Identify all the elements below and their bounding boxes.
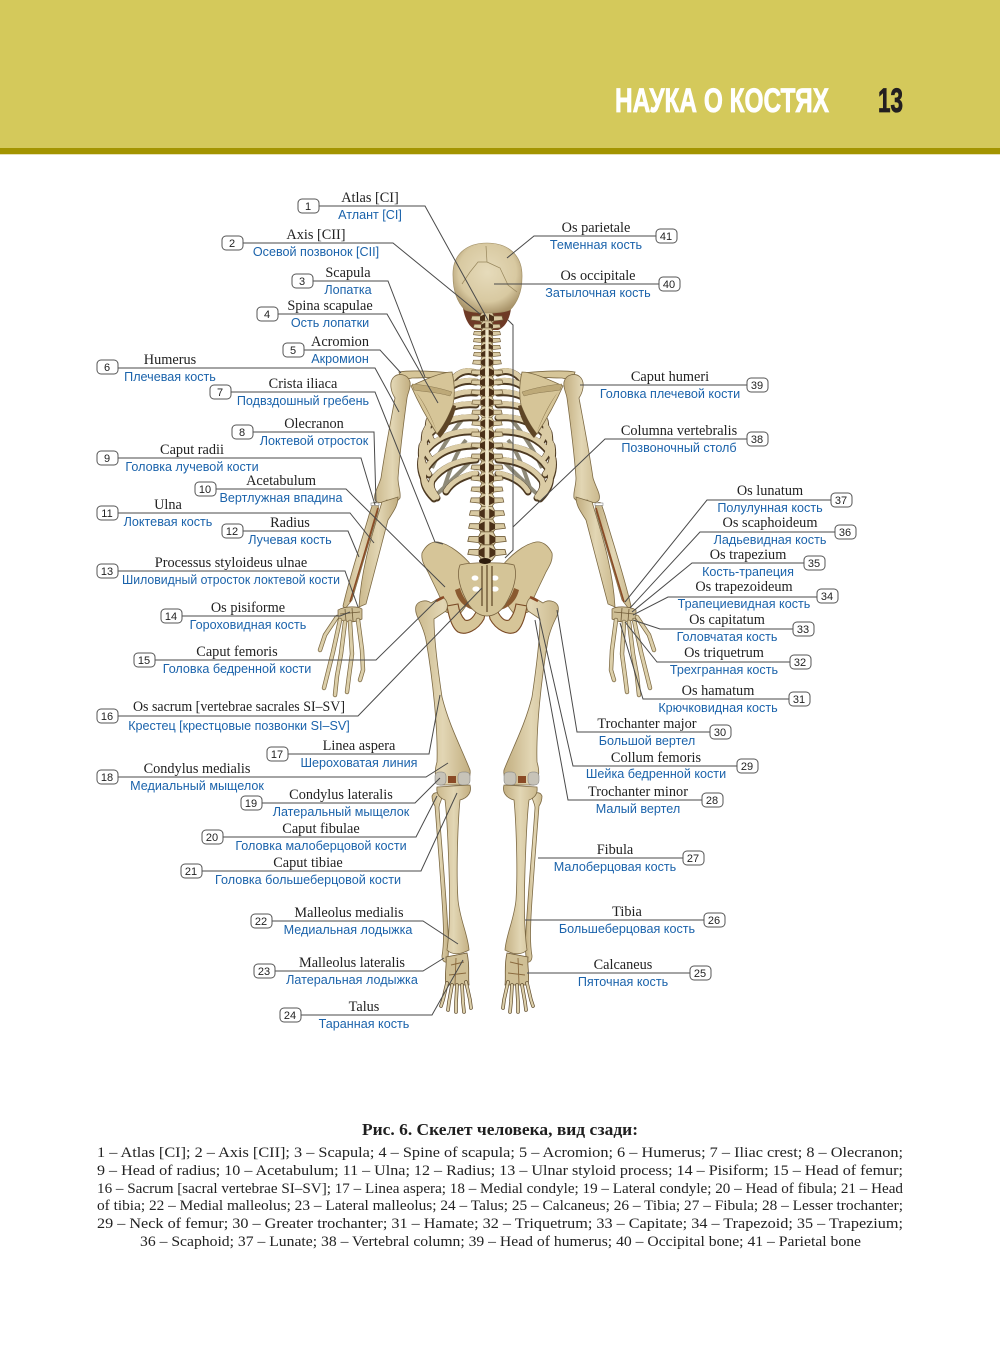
header band	[0, 0, 1000, 155]
sacrum	[458, 558, 516, 616]
callout 13: Processus styloideus ulnae: 13	[101, 566, 113, 578]
callout 19: Condylus lateralis: 19	[245, 798, 257, 810]
callout 2: Axis: Осевой позвонок [CII]	[253, 245, 379, 259]
callout 29: Collum femoris	[537, 608, 758, 781]
callout 34: Os trapezoideum: Трапециевидная кость	[678, 597, 811, 611]
callout 27: Fibula: Малоберцовая кость	[554, 860, 677, 874]
callout 24: Talus: Talus	[349, 999, 380, 1015]
callout 18: Condylus medialis: 18	[101, 772, 113, 784]
callout 20: Caput fibulae: Головка малоберцовой кости	[235, 839, 407, 853]
callout 30: Trochanter major: Trochanter major	[597, 716, 697, 732]
callout 7: Crista iliaca: 7	[217, 387, 223, 399]
callout 11: Ulna: Ulna	[154, 497, 183, 513]
callout 37: Os lunatum: 37	[835, 495, 847, 507]
callout 15: Caput femoris: Головка бедренной кости	[163, 662, 311, 676]
callout 13: Processus styloideus ulnae	[97, 555, 358, 607]
callout 7: Crista iliaca: Crista iliaca	[269, 376, 338, 392]
callout 38: Columna vertebralis: 38	[751, 434, 763, 446]
callout 6: Humerus: Humerus	[144, 352, 197, 368]
callout 3: Scapula: 3	[299, 276, 305, 288]
caption heading: Рис. 6. Скелет человека, вид сзади:	[362, 1120, 638, 1139]
callout 33: Os capitatum: Os capitatum	[689, 612, 765, 628]
callout 22: Malleolus medialis: 22	[255, 916, 267, 928]
callout 9: Caput radii: Caput radii	[160, 442, 224, 458]
callout 22: Malleolus medialis: Медиальная лодыжка	[284, 923, 412, 937]
callout 16: Os sacrum: Os sacrum [vertebrae sacrales SI–SV]	[133, 699, 345, 715]
callout 17: Linea aspera: Шероховатая линия	[300, 756, 418, 770]
callout 5: Acromion	[283, 334, 401, 373]
callout 41: Os parietale: Теменная кость	[550, 238, 643, 252]
callout 14: Os pisiforme: Гороховидная кость	[190, 618, 307, 632]
callout 5: Acromion: Acromion	[311, 334, 369, 350]
callout 14: Os pisiforme: 14	[165, 611, 177, 623]
callout 27: Fibula: 27	[687, 853, 699, 865]
callout 13: Processus styloideus ulnae: Шиловидный отросток локтевой кости	[122, 573, 340, 587]
callout 21: Caput tibiae: 21	[185, 866, 197, 878]
callout 16: Os sacrum	[97, 588, 482, 733]
callout 18: Condylus medialis: Condylus medialis	[144, 761, 251, 777]
callout 4: Spina scapulae: Spina scapulae	[287, 298, 373, 314]
caption body: 29 – Neck of femur; 30 – Greater trochanter; 31 – Hamate; 32 – Triquetrum; 33 – Capitate; 34 – Trapezoid; 35 – Trapezium;	[97, 1216, 903, 1232]
callout 15: Caput femoris	[134, 600, 437, 676]
callout 26: Tibia	[525, 904, 725, 936]
callout 14: Os pisiforme	[161, 600, 350, 632]
callout 6: Humerus	[97, 352, 399, 412]
callout 26: Tibia: Большеберцовая кость	[559, 922, 696, 936]
callout 24: Talus	[280, 960, 463, 1031]
callout 40: Os occipitale: Затылочная кость	[545, 286, 651, 300]
callout 31: Os hamatum: Os hamatum	[682, 683, 754, 699]
callout 17: Linea aspera: Linea aspera	[323, 738, 396, 754]
callout 39: Caput humeri: 39	[751, 380, 763, 392]
callout 35: Os trapezium: 35	[808, 558, 820, 570]
callout 30: Trochanter major: 30	[714, 727, 726, 739]
callout 15: Caput femoris: 15	[138, 655, 150, 667]
caption body: 9 – Head of radius; 10 – Acetabulum; 11 – Ulna; 12 – Radius; 13 – Ulnar styloid process; 14 – Pisiform; 15 – Head of femur;	[97, 1163, 903, 1179]
callout 20: Caput fibulae	[202, 796, 437, 853]
caption body: of tibia; 22 – Medial malleolus; 23 – Lateral malleolus; 24 – Talus; 25 – Calcaneus; 26 – Tibia; 27 – Fibula; 28 – Lesser trochanter;	[97, 1198, 903, 1214]
callout 13: Processus styloideus ulnae: Processus styloideus ulnae	[155, 555, 307, 571]
callout 39: Caput humeri	[580, 369, 768, 401]
callout 28: Trochanter minor	[535, 620, 723, 816]
caption body	[97, 1145, 904, 1250]
callout 33: Os capitatum: 33	[797, 624, 809, 636]
callout 33: Os capitatum: Головчатая кость	[677, 630, 778, 644]
skull	[453, 243, 522, 313]
callout 19: Condylus lateralis: Condylus lateralis	[289, 787, 393, 803]
caption body: 36 – Scaphoid; 37 – Lunate; 38 – Vertebral column; 39 – Head of humerus; 40 – Occipital bone; 41 – Parietal bone	[140, 1234, 861, 1250]
callout 19: Condylus lateralis: Латеральный мыщелок	[273, 805, 410, 819]
callout 36: Os scaphoideum: Ладьевидная кость	[714, 533, 827, 547]
callout 3: Scapula: Scapula	[325, 265, 371, 281]
callout 26: Tibia: Tibia	[612, 904, 642, 920]
callout 2: Axis: Axis [CII]	[286, 227, 346, 243]
callout 18: Condylus medialis	[97, 761, 448, 793]
chapter title: НАУКА О КОСТЯХ	[615, 82, 829, 120]
callout 36: Os scaphoideum: 36	[839, 527, 851, 539]
callout 14: Os pisiforme: Os pisiforme	[211, 600, 285, 616]
callout 12: Radius: 12	[226, 526, 238, 538]
callout 36: Os scaphoideum: Os scaphoideum	[723, 515, 817, 531]
callout 38: Columna vertebralis: Columna vertebralis	[621, 423, 738, 439]
callout 11: Ulna: 11	[101, 508, 113, 520]
callout 11: Ulna	[97, 497, 374, 543]
callout 37: Os lunatum: Os lunatum	[737, 483, 803, 499]
callout 34: Os trapezoideum: Os trapezoideum	[695, 579, 793, 595]
callout 29: Collum femoris: Шейка бедренной кости	[586, 767, 726, 781]
callout 10: Acetabulum: 10	[199, 484, 211, 496]
callout 20: Caput fibulae: 20	[206, 832, 218, 844]
callout 4: Spina scapulae	[257, 298, 438, 403]
callout 5: Acromion: 5	[290, 345, 296, 357]
callout 40: Os occipitale: Os occipitale	[560, 268, 636, 284]
callout 38: Columna vertebralis: Позвоночный столб	[621, 441, 737, 455]
callout 27: Fibula: Fibula	[597, 842, 634, 858]
callout 26: Tibia: 26	[708, 915, 720, 927]
callout 32: Os triquetrum: Трехгранная кость	[670, 663, 778, 677]
callout 21: Caput tibiae	[181, 793, 457, 887]
callout 23: Malleolus lateralis: 23	[258, 966, 270, 978]
callout 41: Os parietale: Os parietale	[562, 220, 630, 236]
callout 4: Spina scapulae: Ость лопатки	[291, 316, 369, 330]
callout 16: Os sacrum: Крестец [крестцовые позвонки SI–SV]	[128, 719, 350, 733]
callout 12: Radius: Лучевая кость	[248, 533, 332, 547]
callout 35: Os trapezium	[632, 547, 825, 612]
figure caption	[97, 1120, 904, 1250]
callout 11: Ulna: Локтевая кость	[124, 515, 213, 529]
callout 9: Caput radii	[97, 442, 375, 505]
callout 30: Trochanter major: Большой вертел	[599, 734, 695, 748]
callout 31: Os hamatum: 31	[793, 694, 805, 706]
callout 2: Axis	[222, 227, 480, 314]
skeleton illustration	[320, 243, 654, 1012]
callout 28: Trochanter minor: Trochanter minor	[588, 784, 688, 800]
left half of skeleton	[320, 370, 486, 1012]
callout 23: Malleolus lateralis: Malleolus lateralis	[299, 955, 405, 971]
callout 33: Os capitatum	[633, 612, 814, 644]
spine	[468, 312, 506, 560]
callout 41: Os parietale	[507, 220, 677, 258]
callout 32: Os triquetrum	[625, 622, 811, 677]
callout 25: Calcaneus: Пяточная кость	[578, 975, 669, 989]
callout 23: Malleolus lateralis: Латеральная лодыжка	[286, 973, 418, 987]
callout 12: Radius	[222, 515, 359, 557]
callout 37: Os lunatum: Полулунная кость	[717, 501, 823, 515]
callout 30: Trochanter major	[557, 610, 731, 748]
callout 15: Caput femoris: Caput femoris	[196, 644, 278, 660]
callout 29: Collum femoris: 29	[741, 761, 753, 773]
caption body: 16 – Sacrum [sacral vertebrae SI–SV]; 17 – Linea aspera; 18 – Medial condyle; 19 – Lateral condyle; 20 – Head of fibula; 21 – Head	[97, 1181, 904, 1197]
callout 24: Talus: Таранная кость	[319, 1017, 410, 1031]
callout 39: Caput humeri: Головка плечевой кости	[600, 387, 740, 401]
callout 38: Columna vertebralis	[513, 423, 768, 527]
callout 36: Os scaphoideum	[630, 515, 856, 608]
page number: 13	[878, 82, 903, 120]
callout 27: Fibula	[538, 842, 704, 874]
callout 35: Os trapezium: Os trapezium	[710, 547, 786, 563]
caption body: 1 – Atlas [CI]; 2 – Axis [CII]; 3 – Scapula; 4 – Spine of scapula; 5 – Acromion; 6 – Humerus; 7 – Iliac crest; 8 – Olecranon;	[97, 1145, 903, 1161]
jaw	[463, 308, 511, 330]
callout 1: Atlas: Atlas [CI]	[341, 190, 399, 206]
callout 10: Acetabulum: Вертлужная впадина	[220, 491, 342, 505]
callout 25: Calcaneus	[527, 957, 711, 989]
callout 9: Caput radii: 9	[104, 453, 110, 465]
callout 28: Trochanter minor: Малый вертел	[596, 802, 680, 816]
callout 21: Caput tibiae: Caput tibiae	[273, 855, 343, 871]
callout 32: Os triquetrum: 32	[794, 657, 806, 669]
callout 17: Linea aspera	[267, 695, 440, 770]
callout 41: Os parietale: 41	[660, 231, 672, 243]
callout 8: Olecranon	[232, 416, 376, 503]
callout 31: Os hamatum	[620, 623, 810, 715]
callout 8: Olecranon: 8	[239, 427, 245, 439]
callout 32: Os triquetrum: Os triquetrum	[684, 645, 764, 661]
callout 34: Os trapezoideum: 34	[821, 591, 833, 603]
callout 23: Malleolus lateralis	[254, 955, 444, 987]
callout 10: Acetabulum: Acetabulum	[246, 473, 316, 489]
callout 24: Talus: 24	[284, 1010, 296, 1022]
callout 6: Humerus: Плечевая кость	[124, 370, 216, 384]
callout 17: Linea aspera: 17	[271, 749, 283, 761]
callout 7: Crista iliaca	[210, 376, 443, 544]
callout 8: Olecranon: Локтевой отросток	[260, 434, 369, 448]
callout 19: Condylus lateralis	[241, 778, 440, 819]
leader line along spine	[505, 320, 513, 558]
callout 4: Spina scapulae: 4	[264, 309, 270, 321]
callout 10: Acetabulum	[195, 473, 445, 587]
callout 7: Crista iliaca: Подвздошный гребень	[237, 394, 370, 408]
callout 16: Os sacrum: 16	[101, 711, 113, 723]
callout 1: Atlas	[298, 190, 488, 320]
callout 1: Atlas: 1	[305, 201, 311, 213]
callout 9: Caput radii: Головка лучевой кости	[125, 460, 259, 474]
callout 22: Malleolus medialis: Malleolus medialis	[294, 905, 404, 921]
callout 3: Scapula	[292, 265, 425, 377]
callout 40: Os occipitale: 40	[663, 279, 675, 291]
right half of skeleton	[488, 370, 654, 1012]
callout 39: Caput humeri: Caput humeri	[631, 369, 709, 385]
callout 25: Calcaneus: Calcaneus	[594, 957, 653, 973]
callout 35: Os trapezium: Кость-трапеция	[702, 565, 794, 579]
callout 6: Humerus: 6	[104, 362, 110, 374]
callout 5: Acromion: Акромион	[311, 352, 369, 366]
callout 34: Os trapezoideum	[633, 579, 838, 615]
callout 20: Caput fibulae: Caput fibulae	[282, 821, 360, 837]
callout 37: Os lunatum	[625, 483, 852, 602]
callout 25: Calcaneus: 25	[694, 968, 706, 980]
callout 21: Caput tibiae: Головка большеберцовой кости	[215, 873, 401, 887]
callout 18: Condylus medialis: Медиальный мыщелок	[130, 779, 264, 793]
callout 12: Radius: Radius	[270, 515, 310, 531]
callout 1: Atlas: Атлант [CI]	[338, 208, 402, 222]
callout 29: Collum femoris: Collum femoris	[611, 750, 702, 766]
callout 40: Os occipitale	[494, 268, 680, 300]
callout 28: Trochanter minor: 28	[706, 795, 718, 807]
callout 22: Malleolus medialis	[251, 905, 458, 944]
callout 31: Os hamatum: Крючковидная кость	[658, 701, 778, 715]
callout 3: Scapula: Лопатка	[324, 283, 372, 297]
callout 8: Olecranon: Olecranon	[284, 416, 344, 432]
callout 2: Axis: 2	[229, 238, 235, 250]
